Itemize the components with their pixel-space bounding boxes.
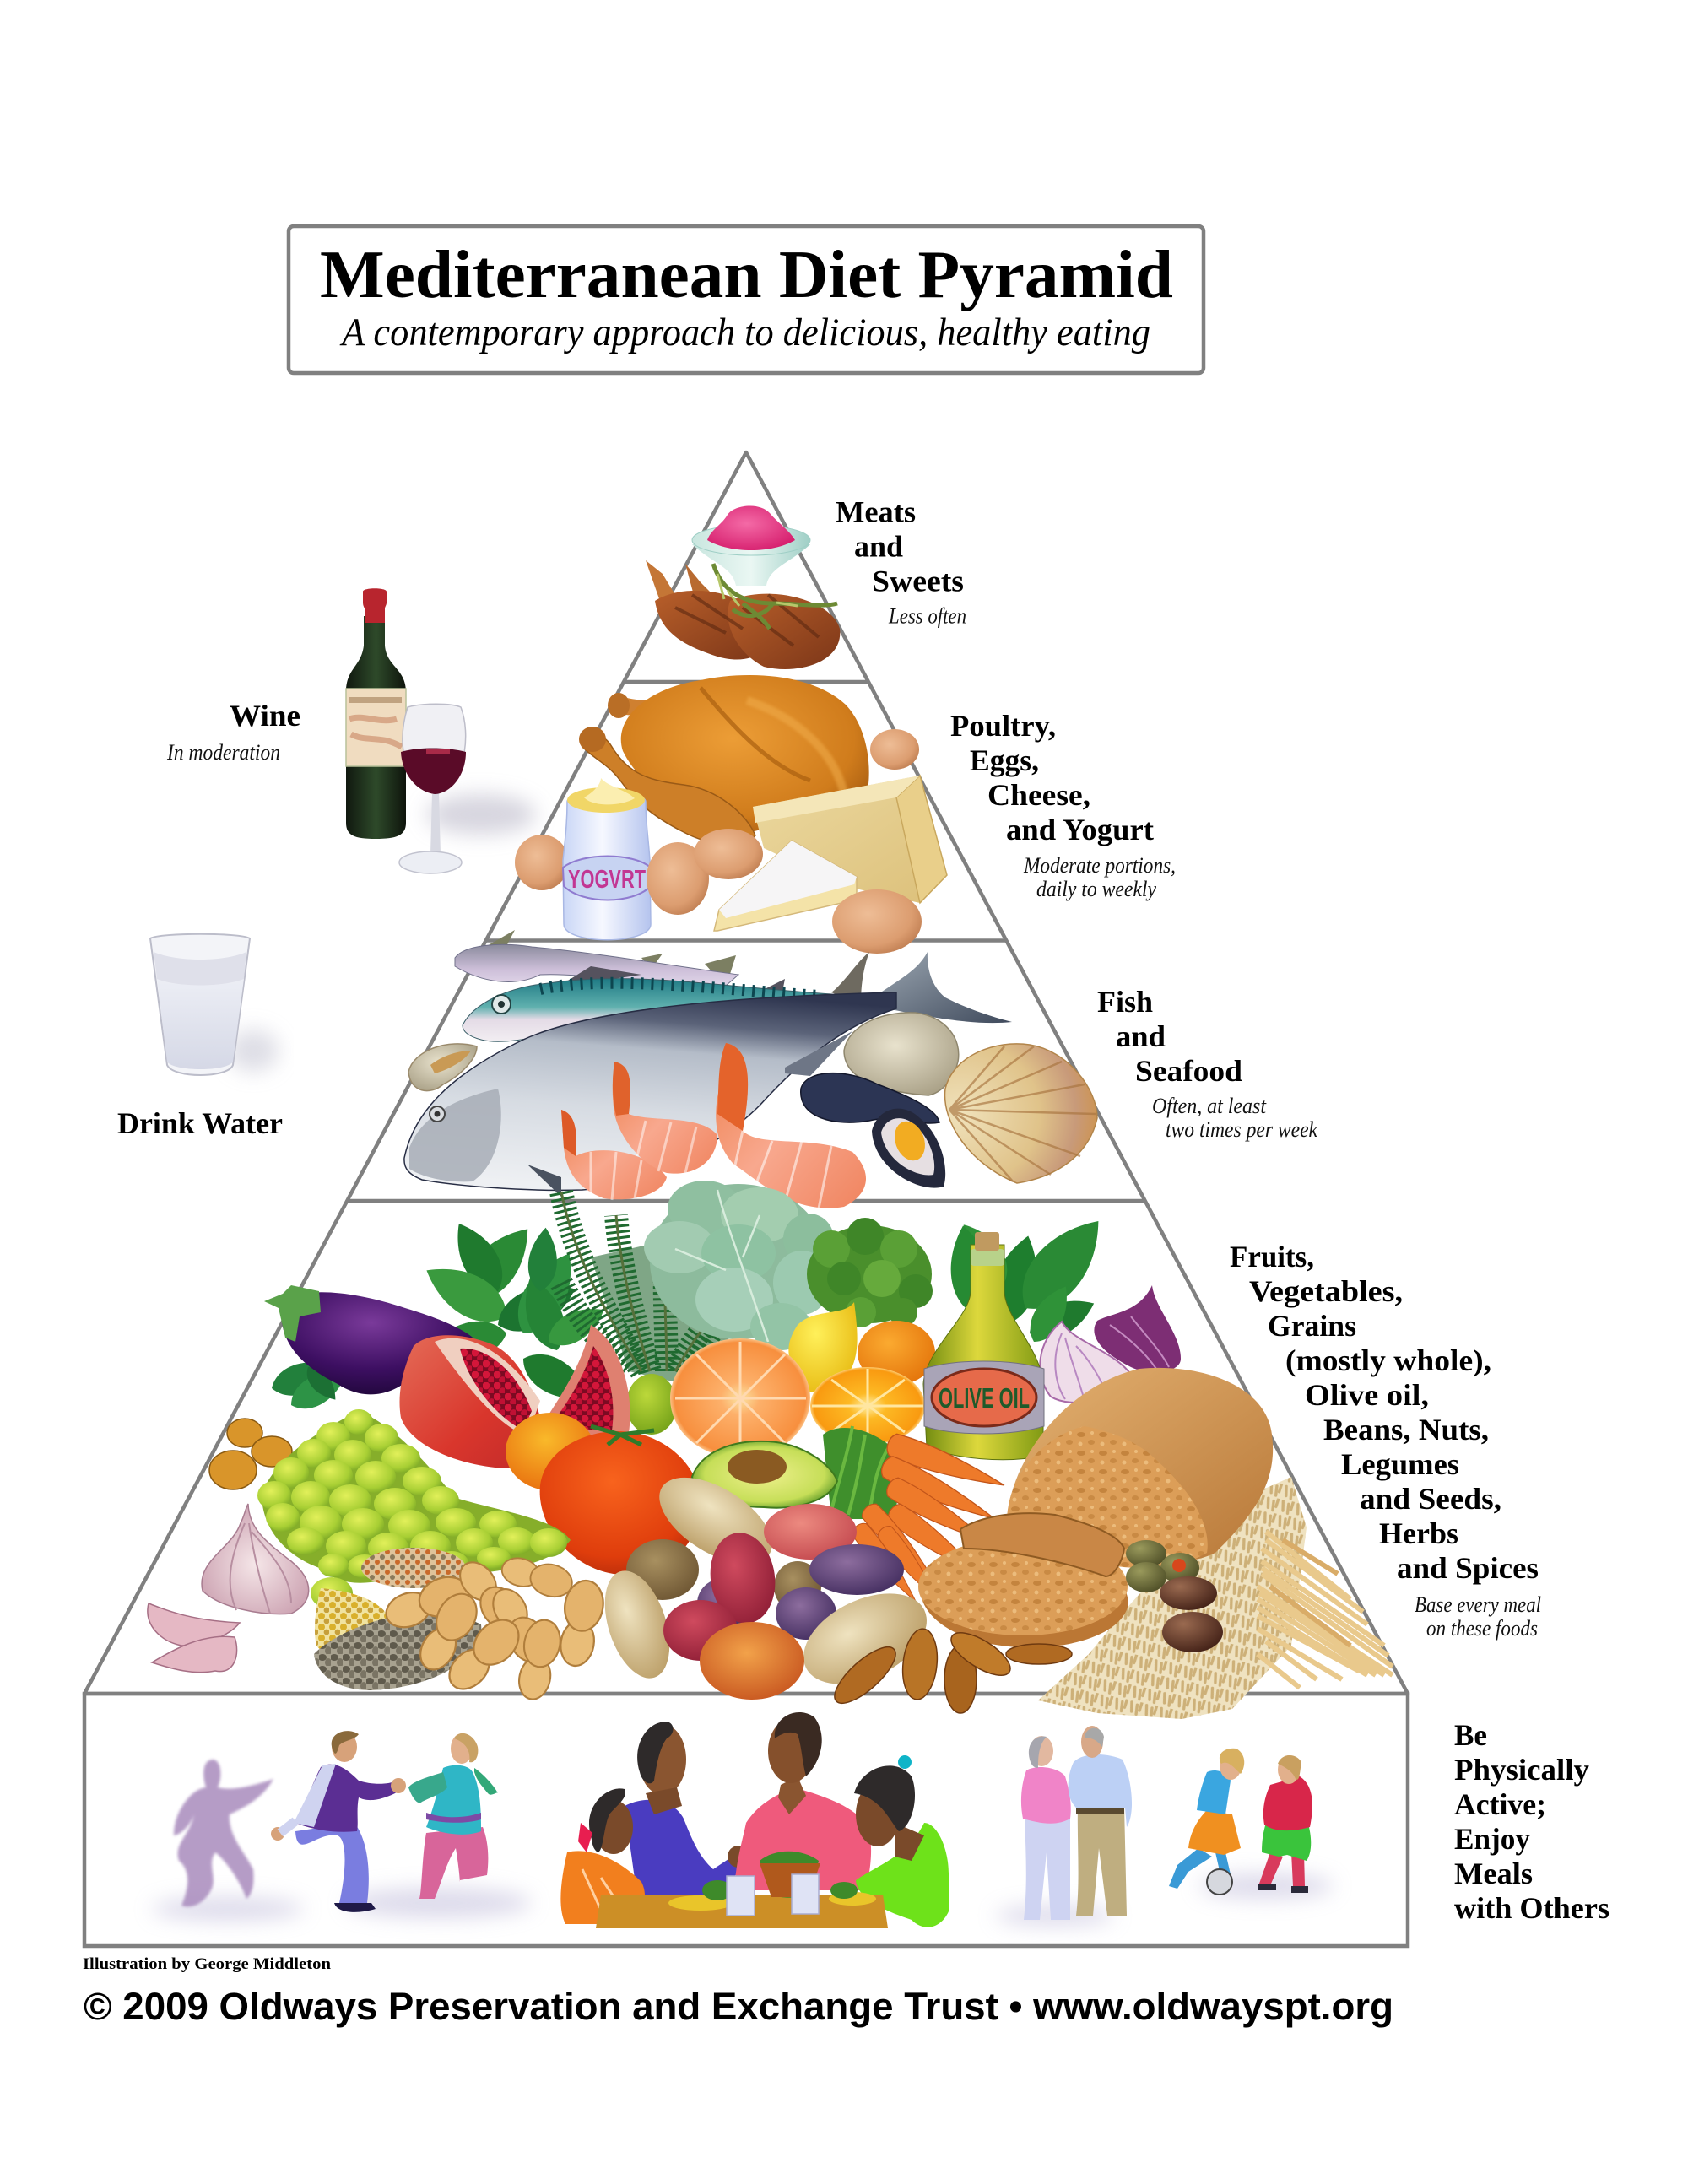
icon: rice heap xyxy=(1038,1477,1307,1719)
icon: big silver fish xyxy=(404,952,1012,1197)
wine note: In moderation xyxy=(166,740,280,765)
drink water label: Drink Water xyxy=(117,1106,283,1140)
icon: tomato xyxy=(540,1426,701,1575)
meats and sweets label xyxy=(836,495,966,628)
plant foods label: Vegetables, xyxy=(1249,1274,1403,1308)
figure: woman dancing xyxy=(408,1733,498,1899)
icon: brie wedge xyxy=(714,841,857,931)
icon: bread loaf xyxy=(1007,1368,1273,1568)
icon: lamb chops xyxy=(646,560,840,669)
tier: plant foods illustration xyxy=(148,1181,1393,1719)
figure: soccer players xyxy=(1169,1749,1312,1895)
wine bottle and glass xyxy=(346,588,536,873)
icon: eggplant xyxy=(264,1285,482,1394)
icon: pomegranate xyxy=(399,1325,630,1468)
table xyxy=(596,1895,888,1928)
water glass xyxy=(150,934,279,1075)
figure: older couple xyxy=(1021,1726,1132,1920)
icon: onion half xyxy=(1040,1322,1132,1403)
meats and sweets label: Sweets xyxy=(872,564,964,597)
wine label xyxy=(166,699,300,765)
icon: pasta xyxy=(1258,1532,1393,1688)
icon: lavender fish xyxy=(455,930,738,987)
icon: small shell xyxy=(408,1044,477,1091)
icon: carrots xyxy=(849,1431,1009,1608)
active and meals label: Active; xyxy=(1454,1787,1546,1821)
icon: lime xyxy=(626,1374,677,1435)
active and meals label: Enjoy xyxy=(1454,1822,1530,1856)
icon: eggs middle xyxy=(647,829,763,915)
meats and sweets label: and xyxy=(854,530,903,564)
plates xyxy=(668,1880,876,1911)
icon: open oyster xyxy=(872,1109,945,1188)
salad bowl xyxy=(760,1852,820,1898)
title heading: Mediterranean Diet Pyramid xyxy=(320,238,1173,312)
poultry label: Eggs, xyxy=(970,743,1039,777)
fish label xyxy=(1097,985,1317,1142)
icon: scallop shell xyxy=(945,1044,1097,1183)
tier: fish and seafood illustration xyxy=(404,930,1097,1208)
icon: egg left xyxy=(515,835,569,890)
icon: yogurt jar xyxy=(563,778,651,940)
woman in pink xyxy=(734,1712,871,1890)
fish label: and xyxy=(1116,1019,1166,1053)
frequency note: Base every meal xyxy=(1415,1592,1541,1617)
icon: basil leaves right xyxy=(943,1205,1117,1349)
tier: people active and eating illustration xyxy=(152,1712,1334,1928)
icon: mint xyxy=(267,1353,354,1418)
subtitle: A contemporary approach to delicious, healthy eating xyxy=(339,311,1150,354)
left child xyxy=(560,1788,645,1924)
active and meals label: Physically xyxy=(1454,1753,1589,1787)
icon: peanuts xyxy=(381,1552,607,1703)
icon: orange half xyxy=(810,1367,925,1445)
shadows xyxy=(152,1873,1334,1926)
icon: hazelnuts xyxy=(209,1419,292,1489)
icon: clam xyxy=(844,1013,959,1095)
icon: potatoes xyxy=(592,1460,941,1703)
man in blue xyxy=(625,1722,749,1897)
poultry label: and Yogurt xyxy=(1006,813,1154,846)
icon: roast turkey xyxy=(579,675,869,844)
icon: yellow tomato xyxy=(506,1413,595,1490)
icon: sorbet bowl xyxy=(692,506,810,586)
icon: egg front xyxy=(832,889,922,954)
plant foods label: Grains xyxy=(1268,1309,1356,1343)
icon: lemon xyxy=(788,1302,858,1392)
icon: kale xyxy=(644,1181,834,1350)
illustration credit: Illustration by George Middleton xyxy=(83,1955,331,1973)
figure: man dancing xyxy=(271,1731,406,1912)
icon: garlic cloves xyxy=(148,1603,240,1673)
title box xyxy=(289,226,1204,373)
icon: hard cheese xyxy=(753,776,947,903)
poultry label xyxy=(950,709,1176,901)
wine glass xyxy=(399,704,466,873)
icon: olive oil bottle xyxy=(923,1232,1044,1460)
frequency note: Often, at least xyxy=(1152,1094,1267,1118)
plant foods label: (mostly whole), xyxy=(1285,1343,1491,1377)
water glasses xyxy=(727,1874,819,1916)
active and meals label xyxy=(1454,1718,1610,1925)
plant foods label: and Spices xyxy=(1397,1551,1539,1585)
wine bottle xyxy=(346,588,406,839)
tier: sweets and meats illustration xyxy=(646,506,840,669)
frequency note: Moderate portions, xyxy=(1023,853,1176,878)
icon: eggs back xyxy=(870,729,919,770)
pyramid outline and tier lines xyxy=(84,452,1408,1946)
poultry label: Cheese, xyxy=(987,778,1090,812)
active and meals label: Meals xyxy=(1454,1857,1533,1890)
frequency note: Less often xyxy=(888,604,966,628)
icon: lentils and grains xyxy=(314,1548,481,1690)
icon: olive oil bottle: OLIVE OIL xyxy=(939,1382,1030,1414)
icon: avocado half xyxy=(692,1441,837,1508)
icon: whole orange xyxy=(858,1321,935,1385)
fish label: Fish xyxy=(1097,985,1153,1019)
icon: shrimp xyxy=(561,1043,866,1208)
plant foods label: Legumes xyxy=(1341,1447,1459,1481)
icon: basil leaves left xyxy=(416,1215,611,1413)
frequency note xyxy=(1415,1592,1541,1641)
icon: rosemary sprigs xyxy=(561,1192,751,1384)
icon: olives xyxy=(1126,1540,1223,1652)
frequency note xyxy=(1152,1094,1317,1142)
meats and sweets label: Meats xyxy=(836,495,916,528)
icon: bread slices xyxy=(918,1513,1128,1647)
figure: purple silhouette dancer xyxy=(174,1760,273,1906)
plant foods label: Fruits, xyxy=(1230,1240,1314,1273)
frequency note: on these foods xyxy=(1426,1616,1538,1641)
frequency note: two times per week xyxy=(1166,1117,1317,1142)
frequency note xyxy=(1023,853,1176,901)
plant foods label: Herbs xyxy=(1379,1516,1458,1550)
right child xyxy=(854,1755,949,1927)
frequency note: daily to weekly xyxy=(1036,877,1156,901)
active and meals label: Be xyxy=(1454,1718,1487,1752)
icon: mussel xyxy=(801,1073,939,1123)
icon: pink orange half xyxy=(670,1338,810,1458)
icon: carrot greens xyxy=(823,1426,903,1519)
icon: parsley xyxy=(807,1218,933,1327)
plant foods label: Olive oil, xyxy=(1305,1378,1429,1412)
wine label: Wine xyxy=(230,699,300,733)
tier: poultry, eggs, cheese, yogurt illustration xyxy=(515,675,947,954)
figure: family at table xyxy=(560,1712,949,1928)
active and meals label: with Others xyxy=(1454,1891,1610,1925)
icon: almonds xyxy=(826,1624,1072,1713)
copyright line: © 2009 Oldways Preservation and Exchange Trust • www.oldwayspt.org xyxy=(84,1985,1393,2028)
plant foods label xyxy=(1230,1240,1541,1641)
icon: garlic bulb xyxy=(202,1504,309,1614)
icon: red onion xyxy=(1094,1285,1181,1372)
plant foods label: Beans, Nuts, xyxy=(1323,1413,1489,1446)
poultry label: Poultry, xyxy=(950,709,1056,743)
plant foods label: and Seeds, xyxy=(1360,1482,1501,1516)
icon: mackerel xyxy=(463,952,869,1041)
fish label: Seafood xyxy=(1135,1054,1242,1088)
icon: grapes xyxy=(257,1409,571,1609)
icon: yogurt jar: YOGVRT xyxy=(568,864,646,894)
